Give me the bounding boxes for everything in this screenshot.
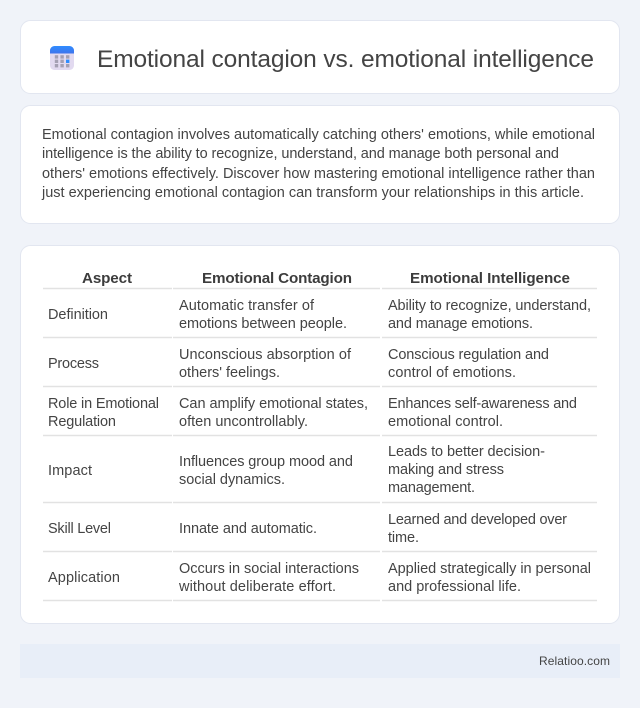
row: definition: emotions between people.	[179, 316, 347, 332]
row: definition: Automatic transfer of	[179, 298, 315, 314]
row: role in emotional regulation: often uncontrollably.	[179, 414, 308, 430]
row: definition: and manage emotions.	[388, 316, 533, 332]
text block: introduction paragraph: intelligence is the ability to recognize, understand, and manage both personal and	[42, 146, 559, 162]
row: process: Unconscious absorption of	[179, 347, 352, 363]
panel: introduction	[20, 106, 620, 224]
text block: introduction paragraph: others' emotions effectively. Discover how mastering emotional intelligence rather than	[42, 166, 595, 182]
panel: title card	[20, 20, 620, 94]
row: impact: Leads to better decision-	[388, 444, 545, 460]
footer bar	[20, 644, 620, 678]
table header row: Emotional Contagion	[202, 270, 352, 287]
icon: calendar	[50, 46, 74, 70]
row: role in emotional regulation	[43, 396, 597, 436]
row: impact	[43, 444, 597, 502]
row: skill level: Learned and developed over	[388, 512, 567, 528]
row: process	[43, 347, 597, 386]
row: process: control of emotions.	[388, 365, 516, 381]
row: application: Application	[48, 570, 120, 586]
row: process: others' feelings.	[179, 365, 280, 381]
row: skill level: time.	[388, 530, 419, 546]
row: role in emotional regulation: Role in Emotional	[48, 396, 159, 412]
text block: introduction paragraph: just experiencing emotional contagion can transform your relationships in this article.	[41, 185, 584, 201]
row: skill level: Innate and automatic.	[179, 521, 317, 537]
row: application: Occurs in social interactions	[179, 561, 359, 577]
row: definition: Definition	[48, 307, 108, 323]
row: role in emotional regulation: emotional control.	[388, 414, 503, 430]
row: impact: Influences group mood and	[179, 454, 353, 470]
row: role in emotional regulation: Can amplify emotional states,	[179, 396, 368, 412]
row: application: Applied strategically in personal	[388, 561, 591, 577]
text block: introduction paragraph	[41, 127, 595, 201]
row: impact: making and stress	[388, 462, 504, 478]
table header row: Aspect	[82, 270, 132, 287]
table header row	[43, 270, 597, 288]
title: Emotional contagion vs. emotional intelligence	[97, 46, 594, 73]
row: definition: Ability to recognize, understand,	[388, 298, 591, 314]
row: impact: management.	[388, 480, 475, 496]
row: process: Conscious regulation and	[388, 347, 549, 363]
row: role in emotional regulation: Regulation	[48, 414, 116, 430]
row: skill level	[43, 512, 597, 552]
panel: comparison table	[20, 246, 620, 624]
row: application: and professional life.	[388, 579, 521, 595]
row: application	[43, 561, 597, 600]
row: skill level: Skill Level	[48, 521, 111, 537]
row: application: without deliberate effort.	[178, 579, 336, 595]
table header row: Emotional Intelligence	[410, 270, 570, 287]
row: impact: Impact	[48, 463, 92, 479]
row: impact: social dynamics.	[179, 472, 285, 488]
footer credit: Relatioo.com	[539, 654, 610, 668]
row: definition	[43, 298, 597, 338]
row: role in emotional regulation: Enhances self-awareness and	[388, 396, 577, 412]
row: process: Process	[48, 356, 99, 372]
text block: introduction paragraph: Emotional contagion involves automatically catching others' emotions, while emotional	[42, 127, 595, 143]
